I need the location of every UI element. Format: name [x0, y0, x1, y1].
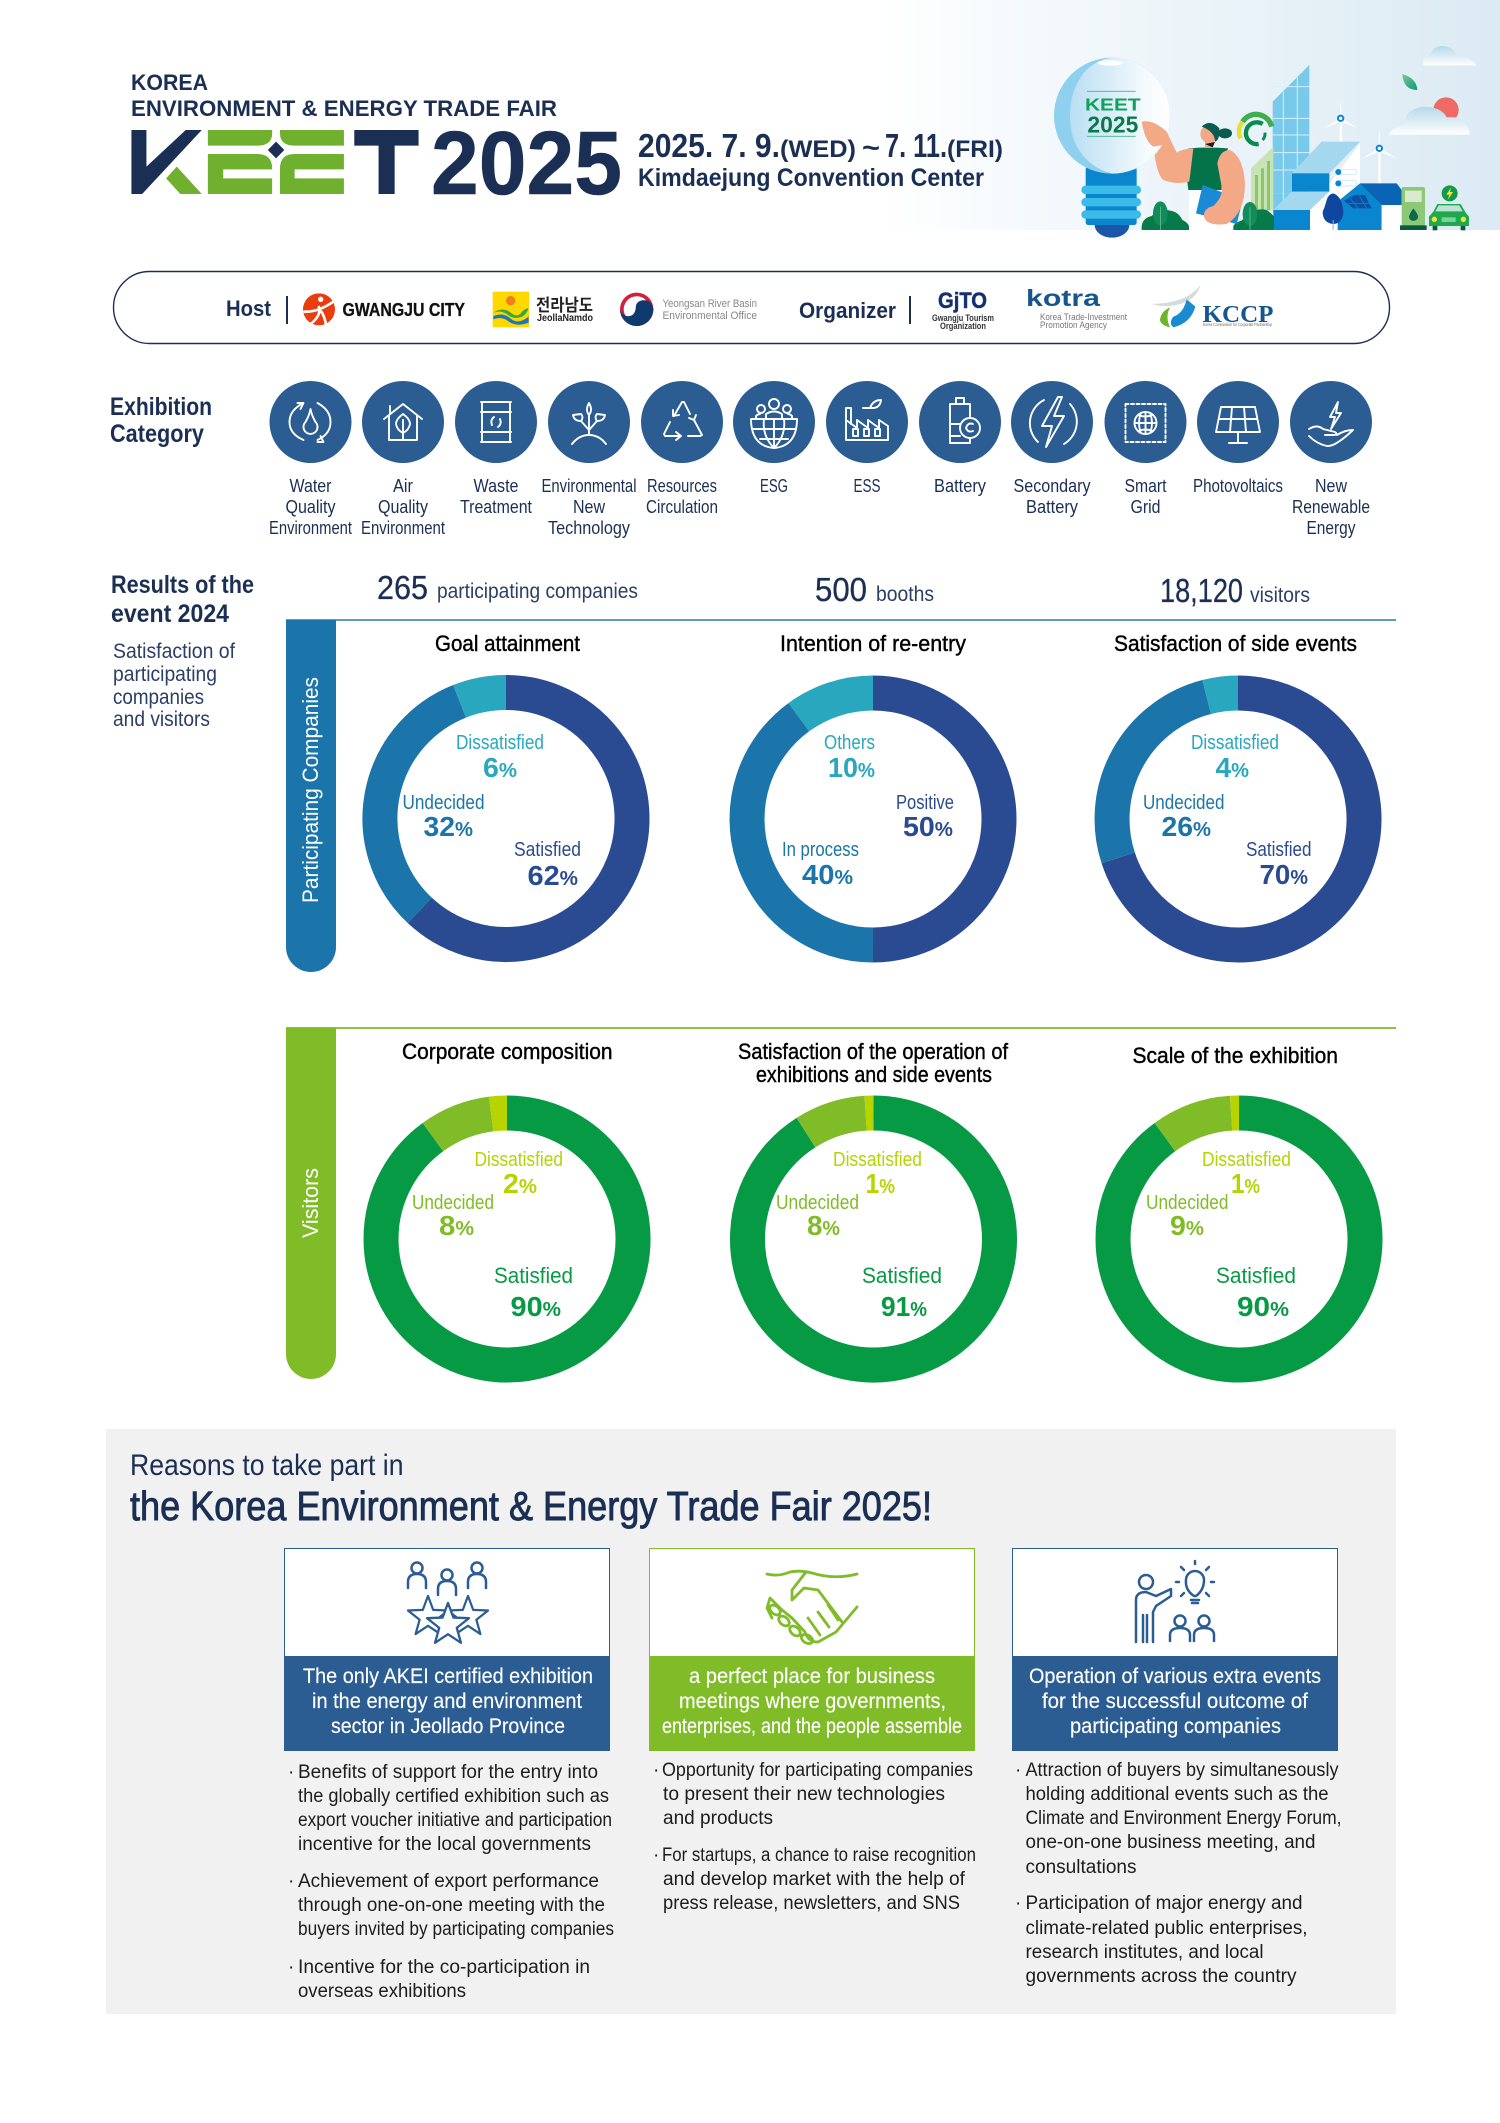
card title: participating companies — [1070, 1715, 1281, 1738]
header title block — [131, 70, 1003, 214]
category: secondary battery — [1011, 381, 1093, 517]
chart: corporate composition: 8% — [439, 1210, 474, 1241]
chart: satisfaction of the operation: 91% — [881, 1291, 927, 1322]
chart: goal attainment: Undecided — [402, 792, 484, 814]
chart: corporate composition: 2% — [503, 1168, 537, 1199]
card text: and develop market with the help of — [663, 1869, 966, 1890]
fair name: ENVIRONMENT & ENERGY TRADE FAIR — [131, 96, 557, 121]
icon: people and stars — [408, 1562, 488, 1643]
card text — [1015, 1760, 1342, 1987]
venue: Kimdaejung Convention Center — [638, 164, 984, 192]
chart: satisfaction of side events: 26% — [1162, 811, 1211, 842]
date: (FRI) — [947, 136, 1003, 163]
logo: Gwangju Tourism Organization: Organization — [940, 321, 986, 332]
chart: intention of re-entry: 50% — [903, 811, 953, 842]
cloud large — [1388, 107, 1470, 135]
card title: The only AKEI certified exhibition — [303, 1665, 593, 1688]
logo: KCCP — [1152, 285, 1274, 328]
logo: Jeollanam-do: 전라남도 — [536, 296, 593, 315]
category: smart grid: Grid — [1130, 497, 1160, 517]
card text: Opportunity for participating companies — [662, 1760, 973, 1781]
bushes — [1142, 201, 1274, 230]
card text: and products — [663, 1808, 773, 1829]
category: air quality: Environment — [361, 518, 445, 538]
panel: reasons to take part — [106, 1429, 1396, 2014]
category: water quality: Quality — [286, 497, 336, 517]
card text: Climate and Environment Energy Forum, — [1026, 1808, 1342, 1829]
chart: corporate composition — [381, 1039, 633, 1365]
chart: scale of the exhibition: Dissatisfied — [1202, 1149, 1291, 1171]
heading — [130, 1449, 932, 1529]
category: new renewable energy: Renewable — [1292, 497, 1370, 517]
category: environmental new technology: New — [573, 497, 606, 517]
host label: Host — [226, 296, 272, 321]
card text: · — [653, 1760, 659, 1781]
category: smart grid — [1104, 381, 1186, 517]
card: business meetings — [649, 1548, 976, 1914]
organizer label: Organizer — [799, 298, 896, 323]
heading: the Korea Environment & Energy Trade Fair 2025! — [130, 1483, 932, 1529]
cloud small — [1423, 46, 1477, 65]
illustration: bulb, woman and green city — [1054, 46, 1477, 238]
category: ESS — [826, 381, 908, 496]
KEET logo — [131, 130, 419, 194]
stat: participating companies — [377, 569, 638, 606]
logo: Jeollanam-do: JeollaNamdo — [537, 313, 593, 324]
card text: the globally certified exhibition such as — [298, 1786, 609, 1807]
card text: · — [1015, 1893, 1021, 1914]
card text: overseas exhibitions — [298, 1981, 466, 2002]
chart: satisfaction of the operation: 8% — [807, 1210, 840, 1241]
chart: goal attainment — [380, 631, 632, 944]
chart: satisfaction of side events: Satisfaction of side events — [1114, 631, 1357, 656]
stat: booths — [815, 571, 934, 608]
chart: scale of the exhibition: 1% — [1231, 1168, 1260, 1199]
category: air quality — [361, 381, 445, 538]
chart: corporate composition: Dissatisfied — [474, 1149, 563, 1171]
chart: intention of re-entry — [747, 631, 999, 945]
chart: goal attainment: Satisfied — [514, 839, 581, 861]
chart: satisfaction of side events — [1112, 631, 1364, 945]
description: participating — [113, 663, 217, 686]
chart: satisfaction of side events: Undecided — [1143, 792, 1224, 814]
logo: Yeongsan River Basin Environmental Office: Yeongsan River Basin — [662, 298, 757, 310]
chart: satisfaction of the operation: Dissatisfied — [833, 1149, 922, 1171]
light bulb: 2025 — [1087, 111, 1138, 137]
leaf — [1402, 74, 1417, 90]
chart: goal attainment: 62% — [528, 860, 578, 891]
icon: presenter with light bulb — [1136, 1561, 1214, 1642]
card text: · — [288, 1871, 294, 1892]
section heading: results of the event 2024: Results of the — [111, 571, 254, 599]
card text: Benefits of support for the entry into — [298, 1762, 598, 1783]
logo: KCCP: KCCP — [1202, 302, 1274, 328]
date: 2025. 7. 9. — [638, 127, 780, 164]
chart: scale of the exhibition — [1113, 1043, 1365, 1365]
category: photovoltaics — [1193, 381, 1283, 496]
category: new renewable energy: Energy — [1306, 518, 1356, 538]
category: resources circulation: Circulation — [646, 497, 718, 517]
chart: goal attainment: Goal attainment — [435, 631, 580, 656]
card: extra events — [1012, 1548, 1342, 1987]
category: environmental new technology: Environmental — [542, 476, 636, 496]
logo: Gwangju City: GWANGJU CITY — [342, 300, 465, 320]
year: 2025 — [431, 114, 622, 214]
category: waste treatment — [455, 381, 537, 517]
card title: for the successful outcome of — [1042, 1690, 1308, 1713]
header background — [880, 0, 1500, 230]
category: water quality — [269, 381, 352, 538]
chart: corporate composition: 90% — [510, 1291, 561, 1322]
heading: Exhibition — [110, 393, 212, 421]
chart: satisfaction of side events: 4% — [1216, 752, 1249, 783]
date: (WED) — [780, 136, 856, 163]
chart: satisfaction of the operation: 1% — [866, 1168, 895, 1199]
card title: meetings where governments, — [679, 1690, 946, 1713]
chart: intention of re-entry: Others — [824, 732, 875, 754]
category: new renewable energy: New — [1315, 476, 1348, 496]
category: water quality: Environment — [269, 518, 352, 538]
category: secondary battery: Battery — [1026, 497, 1078, 517]
chart: satisfaction of the operation: Satisfaction of the operation of — [738, 1039, 1009, 1064]
card text: Participation of major energy and — [1026, 1893, 1302, 1914]
logo: KCCP: Korea Commission for Corporate Partnership — [1203, 322, 1272, 327]
glass tower — [1273, 65, 1309, 210]
stat: booths: booths — [876, 583, 934, 606]
chart: goal attainment: 6% — [483, 752, 517, 783]
category: resources circulation — [641, 381, 723, 517]
description: Satisfaction of — [113, 640, 235, 663]
card title: in the energy and environment — [312, 1690, 582, 1713]
stat: visitors: 18,120 — [1160, 572, 1243, 609]
date: ~ — [862, 132, 880, 163]
light bulb: KEET — [1085, 94, 1141, 114]
card text: one-on-one business meeting, and — [1026, 1832, 1316, 1853]
fair name: KOREA — [131, 70, 208, 95]
chart: goal attainment: Dissatisfied — [456, 732, 544, 754]
dial ring — [1239, 114, 1272, 144]
card text: incentive for the local governments — [298, 1834, 591, 1855]
chart: corporate composition: Undecided — [412, 1192, 494, 1214]
pointing hand over bulb — [1142, 121, 1172, 147]
fair name — [131, 70, 557, 121]
category: smart grid: Smart — [1124, 476, 1166, 496]
category: waste treatment: Waste — [474, 476, 518, 496]
chart: intention of re-entry: 10% — [828, 752, 875, 783]
chart: satisfaction of the operation: Satisfied — [862, 1263, 942, 1288]
side band: Participating Companies — [298, 677, 323, 903]
chart: scale of the exhibition: Scale of the exhibition — [1132, 1043, 1338, 1068]
logo: KOTRA — [1026, 285, 1127, 331]
category: battery: Battery — [934, 476, 986, 496]
card text: consultations — [1026, 1857, 1136, 1878]
card text — [288, 1762, 614, 2002]
panel: visitors — [286, 1027, 1396, 1379]
logo: KOTRA: kotra — [1026, 285, 1100, 311]
card text: to present their new technologies — [663, 1784, 945, 1805]
charging station — [1400, 187, 1427, 230]
category: resources circulation: Resources — [647, 476, 717, 496]
card text: through one-on-one meeting with the — [298, 1895, 605, 1916]
logo: Gwangju Tourism Organization: GjTO — [938, 288, 987, 313]
chart: goal attainment: 32% — [424, 811, 473, 842]
light bulb — [1054, 58, 1170, 238]
icon: handshake — [767, 1571, 857, 1645]
logo: Yeongsan River Basin Environmental Office: Environmental Office — [662, 310, 757, 322]
card text: For startups, a chance to raise recognition — [662, 1845, 976, 1866]
stat: participating companies: participating companies — [437, 580, 638, 603]
card text: research institutes, and local — [1026, 1942, 1264, 1963]
stat: visitors: visitors — [1250, 584, 1310, 607]
card title — [1029, 1665, 1321, 1738]
card: AKEI certified — [284, 1548, 614, 2002]
card text — [653, 1760, 976, 1914]
chart: scale of the exhibition: 90% — [1237, 1291, 1289, 1322]
logo: Gwangju Tourism Organization — [932, 288, 994, 332]
side band — [286, 1028, 336, 1379]
category: environmental new technology — [542, 381, 636, 538]
category: photovoltaics: Photovoltaics — [1193, 476, 1283, 496]
card text: · — [1015, 1760, 1021, 1781]
heading: Reasons to take part in — [130, 1449, 404, 1482]
logo: Jeollanam-do — [493, 292, 593, 327]
description — [113, 640, 235, 731]
stat: booths: 500 — [815, 571, 867, 608]
description: companies — [113, 686, 204, 709]
card title — [303, 1665, 593, 1738]
category: air quality: Air — [393, 476, 413, 496]
chart: satisfaction of side events: Satisfied — [1246, 839, 1312, 861]
section heading: results of the event 2024 — [111, 571, 254, 731]
card text: press release, newsletters, and SNS — [663, 1893, 960, 1914]
category: environmental new technology: Technology — [548, 518, 630, 538]
card title: Operation of various extra events — [1029, 1665, 1321, 1688]
woman — [1142, 121, 1245, 230]
category: water quality: Water — [290, 476, 332, 496]
card text: buyers invited by participating companies — [298, 1919, 614, 1940]
stat: participating companies: 265 — [377, 569, 428, 606]
heading — [110, 393, 212, 448]
card text: climate-related public enterprises, — [1026, 1918, 1308, 1939]
electric car — [1429, 185, 1469, 230]
stepped building — [1273, 142, 1360, 230]
chart: satisfaction of the operation: exhibitions and side events — [756, 1062, 992, 1087]
category: ESS: ESS — [854, 476, 880, 496]
chart: satisfaction of the operation — [738, 1039, 1009, 1365]
category: secondary battery: Secondary — [1014, 476, 1090, 496]
chart: satisfaction of the operation: Undecided — [776, 1192, 859, 1214]
card text: export voucher initiative and participation — [298, 1810, 612, 1831]
category: new renewable energy — [1290, 381, 1372, 538]
chart: intention of re-entry: In process — [782, 839, 859, 861]
green chart building — [1251, 147, 1273, 211]
chart: corporate composition: Satisfied — [494, 1263, 573, 1288]
heading: Category — [110, 420, 204, 448]
chart: intention of re-entry: Positive — [896, 792, 954, 814]
logo: Yeongsan River Basin Environmental Office — [620, 293, 757, 326]
chart: satisfaction of side events: 70% — [1260, 859, 1308, 890]
house with solar roof — [1323, 183, 1402, 230]
chart: scale of the exhibition: Undecided — [1146, 1192, 1228, 1214]
card text: · — [288, 1957, 294, 1978]
chart: scale of the exhibition: Satisfied — [1216, 1263, 1296, 1288]
side band — [286, 620, 336, 972]
side band: Visitors — [298, 1168, 323, 1238]
chart: intention of re-entry: Intention of re-entry — [780, 631, 966, 656]
sun — [1433, 97, 1459, 123]
date: 7. 11. — [885, 127, 947, 164]
chart: scale of the exhibition: 9% — [1170, 1210, 1204, 1241]
logo: Gwangju Tourism Organization: Gwangju Tourism — [932, 313, 994, 324]
logo: KOTRA: Korea Trade-Investment — [1040, 312, 1127, 323]
category: battery — [919, 381, 1001, 496]
date — [638, 127, 1003, 164]
category: air quality: Quality — [378, 497, 428, 517]
stat: visitors — [1160, 572, 1310, 609]
wind turbines — [1324, 99, 1397, 185]
category: waste treatment: Treatment — [460, 497, 532, 517]
card title: a perfect place for business — [689, 1665, 935, 1688]
logo: Gwangju City — [303, 293, 465, 325]
card text: Incentive for the co-participation in — [298, 1957, 590, 1978]
section: exhibition category — [110, 381, 1372, 538]
category: ESG — [733, 381, 815, 496]
card text: Achievement of export performance — [298, 1871, 599, 1892]
section heading: results of the event 2024: event 2024 — [111, 600, 229, 628]
card text: · — [288, 1762, 294, 1783]
card title: enterprises, and the people assemble — [662, 1715, 962, 1738]
category: ESG: ESG — [760, 476, 788, 496]
logo: KOTRA: Promotion Agency — [1040, 320, 1107, 331]
description: and visitors — [113, 708, 210, 731]
card title — [662, 1665, 962, 1738]
chart: satisfaction of side events: Dissatisfied — [1191, 732, 1279, 754]
card text: governments across the country — [1026, 1966, 1297, 1987]
card text: holding additional events such as the — [1026, 1784, 1328, 1805]
card text: Attraction of buyers by simultanesously — [1026, 1760, 1339, 1781]
card text: · — [653, 1845, 659, 1866]
chart: intention of re-entry: 40% — [802, 859, 853, 890]
chart: corporate composition: Corporate composition — [402, 1039, 612, 1064]
panel: host and organizer bar — [114, 272, 1390, 344]
panel: participating companies — [286, 619, 1396, 972]
card title: sector in Jeollado Province — [331, 1715, 565, 1738]
